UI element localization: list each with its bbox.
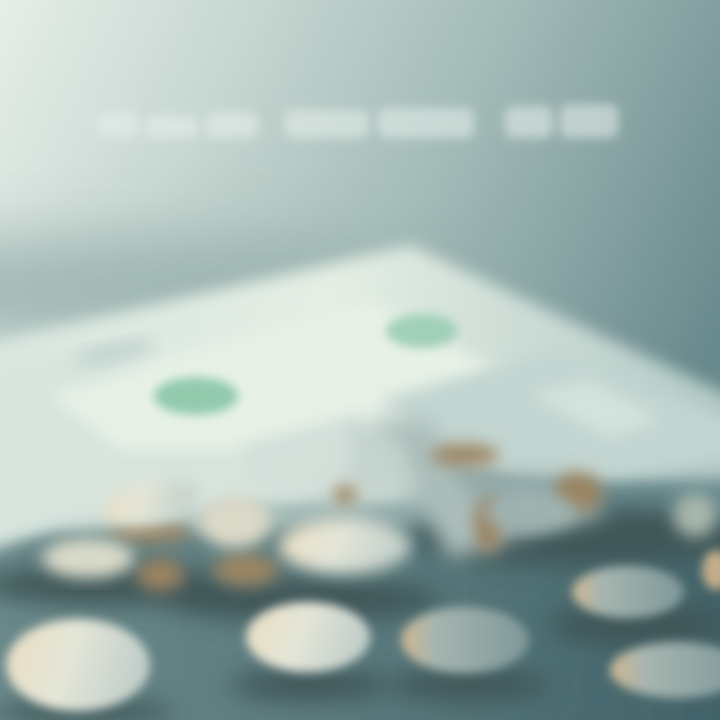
banknote: dark mark	[72, 333, 158, 371]
banknote: back	[0, 245, 720, 480]
coin: centre tilted	[199, 496, 271, 548]
blurred title	[98, 104, 618, 138]
coin shadows	[0, 505, 720, 720]
fanned note strips	[350, 420, 610, 560]
background shade: mid band	[0, 235, 470, 345]
coin: far right edge	[702, 550, 720, 590]
banknote seal: left green	[154, 377, 238, 415]
banknote seal: right green	[386, 314, 458, 348]
banknote: inner panel	[50, 300, 500, 450]
coin: upper left	[98, 472, 202, 534]
coin: front right	[610, 642, 720, 698]
banknote: fanned edges	[240, 415, 410, 505]
coin: right middle	[484, 494, 576, 530]
table surface	[0, 530, 720, 720]
coin: left	[42, 538, 134, 578]
coin: front centre right	[401, 607, 529, 673]
banknote: right sheet	[380, 350, 720, 480]
banknote: right highlight	[530, 380, 660, 438]
coin: right	[572, 566, 684, 618]
bronze edges	[110, 444, 602, 591]
banknote: lower left sheet	[0, 350, 370, 555]
coin pile	[0, 420, 720, 720]
banknote stack	[0, 245, 720, 555]
coin: centre	[279, 518, 411, 574]
coin: front left	[6, 619, 150, 711]
coin: far right top	[673, 493, 717, 537]
coin: front centre	[246, 602, 370, 672]
